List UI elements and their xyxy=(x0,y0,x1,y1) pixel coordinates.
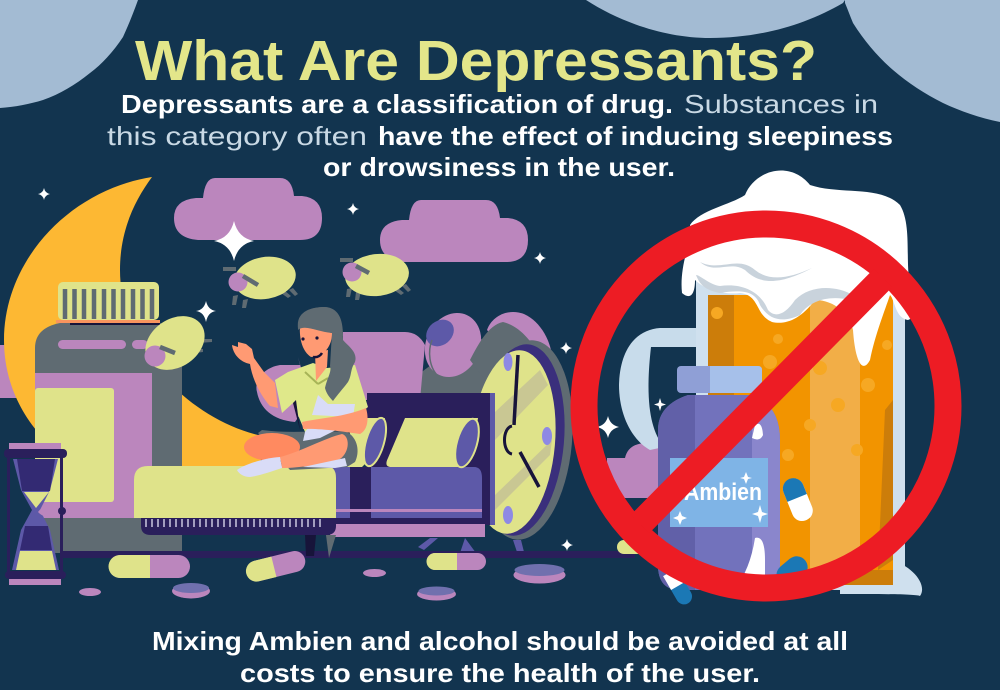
sofa xyxy=(326,332,495,558)
ambien label xyxy=(670,458,768,527)
pillow end: front xyxy=(450,416,484,470)
intro text block xyxy=(107,89,893,182)
forearm xyxy=(302,408,368,434)
capsule: blue on beer xyxy=(780,475,816,524)
cloud: behind moon xyxy=(0,345,25,398)
pillow: rear xyxy=(345,418,385,467)
eyes xyxy=(301,337,305,341)
neck xyxy=(315,350,328,381)
cloud: left top xyxy=(174,178,322,240)
pillow end: rear xyxy=(359,415,391,469)
capsule pill: floor left xyxy=(109,555,190,578)
sheep: top left xyxy=(223,252,299,308)
top-right cloud corner xyxy=(845,0,1000,122)
shorts xyxy=(258,430,358,470)
hair back xyxy=(298,307,356,401)
ambien bottle xyxy=(658,366,780,590)
capsule pill: floor right xyxy=(426,553,486,570)
front leg xyxy=(280,434,348,468)
floor line xyxy=(60,551,635,558)
ambien label text: Ambien xyxy=(684,479,762,506)
top-left cloud corner xyxy=(0,0,138,108)
cloud: behind mug xyxy=(607,443,660,498)
small star near handle xyxy=(654,398,666,411)
top-center cloud edge xyxy=(586,0,845,38)
shirt xyxy=(275,363,368,432)
mug glass xyxy=(696,280,905,590)
capsule: blue bottom right xyxy=(772,552,812,591)
capsule: blue bottom left xyxy=(663,568,695,607)
mug handle xyxy=(619,328,696,450)
bottom caption xyxy=(152,626,848,688)
intro text block: Depressants are a classification of drug. xyxy=(121,89,673,119)
socks xyxy=(237,457,282,477)
mouth xyxy=(313,353,322,357)
clock legs xyxy=(418,538,524,553)
intro text block: Substances in xyxy=(684,89,878,119)
capsule behind bottle xyxy=(617,540,647,554)
alarm clock xyxy=(407,304,581,553)
intro text block: have the effect of inducing sleepiness xyxy=(378,121,893,151)
title: What Are Depressants? xyxy=(135,29,817,93)
hair fringe xyxy=(298,307,343,336)
beer mug xyxy=(619,171,922,596)
clock bell left xyxy=(415,304,491,386)
beer xyxy=(708,295,893,585)
bed xyxy=(134,466,336,556)
tablets on floor xyxy=(79,564,566,600)
moon xyxy=(4,177,262,480)
decorative stars xyxy=(38,188,619,551)
prohibition sign xyxy=(584,224,948,588)
bottom caption: Mixing Ambien and alcohol should be avoided at all xyxy=(152,626,848,656)
paper xyxy=(312,395,355,417)
intro text block: this category often xyxy=(107,121,367,151)
pillow: front xyxy=(386,418,478,467)
medicine bottle large xyxy=(35,282,182,553)
bottle highlights xyxy=(735,424,765,588)
back leg xyxy=(244,433,300,461)
sheep: top right xyxy=(340,251,411,300)
woman xyxy=(232,307,368,477)
intro text block: or drowsiness in the user. xyxy=(323,152,675,182)
shirt shadow wedge xyxy=(293,400,300,430)
foam xyxy=(682,171,917,366)
collar xyxy=(305,372,328,384)
sheep: on bottle xyxy=(135,305,215,381)
hourglass xyxy=(4,443,67,585)
capsule pill: tilted xyxy=(244,549,307,584)
cloud: right top xyxy=(380,200,528,262)
clock bell right xyxy=(487,312,552,370)
bottom caption: costs to ensure the health of the user. xyxy=(240,658,760,688)
face xyxy=(300,326,332,357)
chair back behind arm xyxy=(256,357,310,422)
raised arm and hand xyxy=(232,342,278,408)
label stars xyxy=(673,472,768,525)
